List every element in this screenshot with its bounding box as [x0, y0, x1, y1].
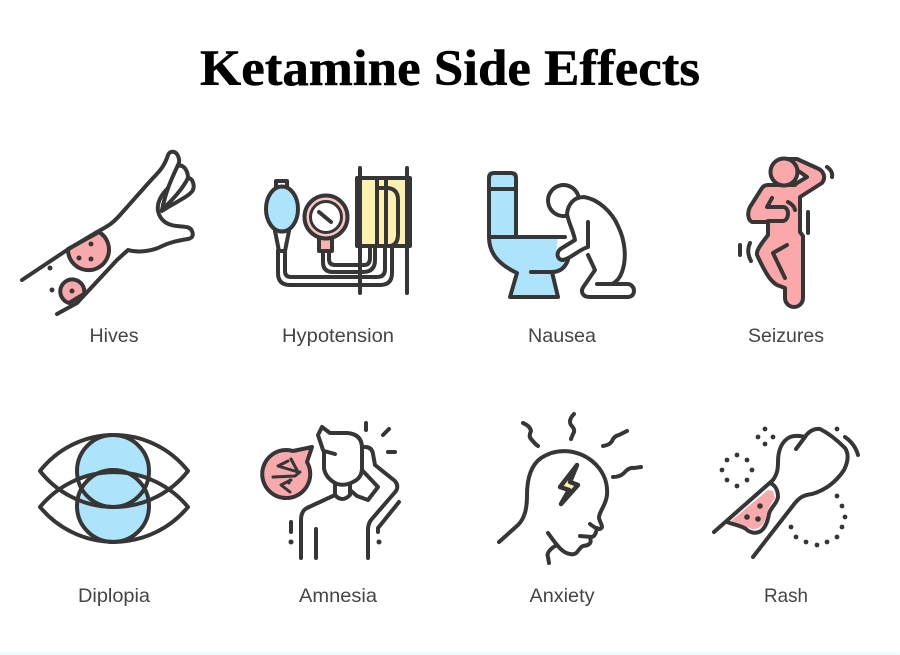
label: Diplopia: Diplopia	[78, 585, 150, 607]
icon: person vomiting into toilet	[489, 173, 634, 297]
icon: arm with rash	[714, 427, 858, 557]
panel: Anxiety	[499, 414, 641, 607]
label: Nausea: Nausea	[528, 325, 596, 347]
icon: person with tangled thought	[262, 423, 399, 558]
icon: double vision eyes	[40, 435, 188, 542]
label: Seizures: Seizures	[748, 325, 824, 347]
icon: blood pressure monitor	[266, 168, 410, 293]
label: Anxiety: Anxiety	[530, 585, 595, 607]
label: Amnesia: Amnesia	[299, 585, 377, 607]
title: Ketamine Side Effects	[200, 41, 700, 97]
icon: head with lightning bolt	[499, 414, 641, 563]
label: Rash: Rash	[764, 585, 808, 607]
label: Hypotension: Hypotension	[282, 325, 394, 347]
label: Hives: Hives	[90, 325, 139, 347]
icon: arm with hives	[22, 152, 194, 314]
panel: Nausea	[489, 173, 634, 347]
panel: Diplopia	[40, 435, 188, 607]
panel: Hives	[22, 152, 194, 347]
panel: Hypotension	[266, 168, 410, 347]
panel: Amnesia	[262, 423, 399, 607]
icon: person having a seizure	[740, 158, 832, 307]
panel: Rash	[714, 427, 858, 607]
panel: Seizures	[740, 158, 832, 347]
